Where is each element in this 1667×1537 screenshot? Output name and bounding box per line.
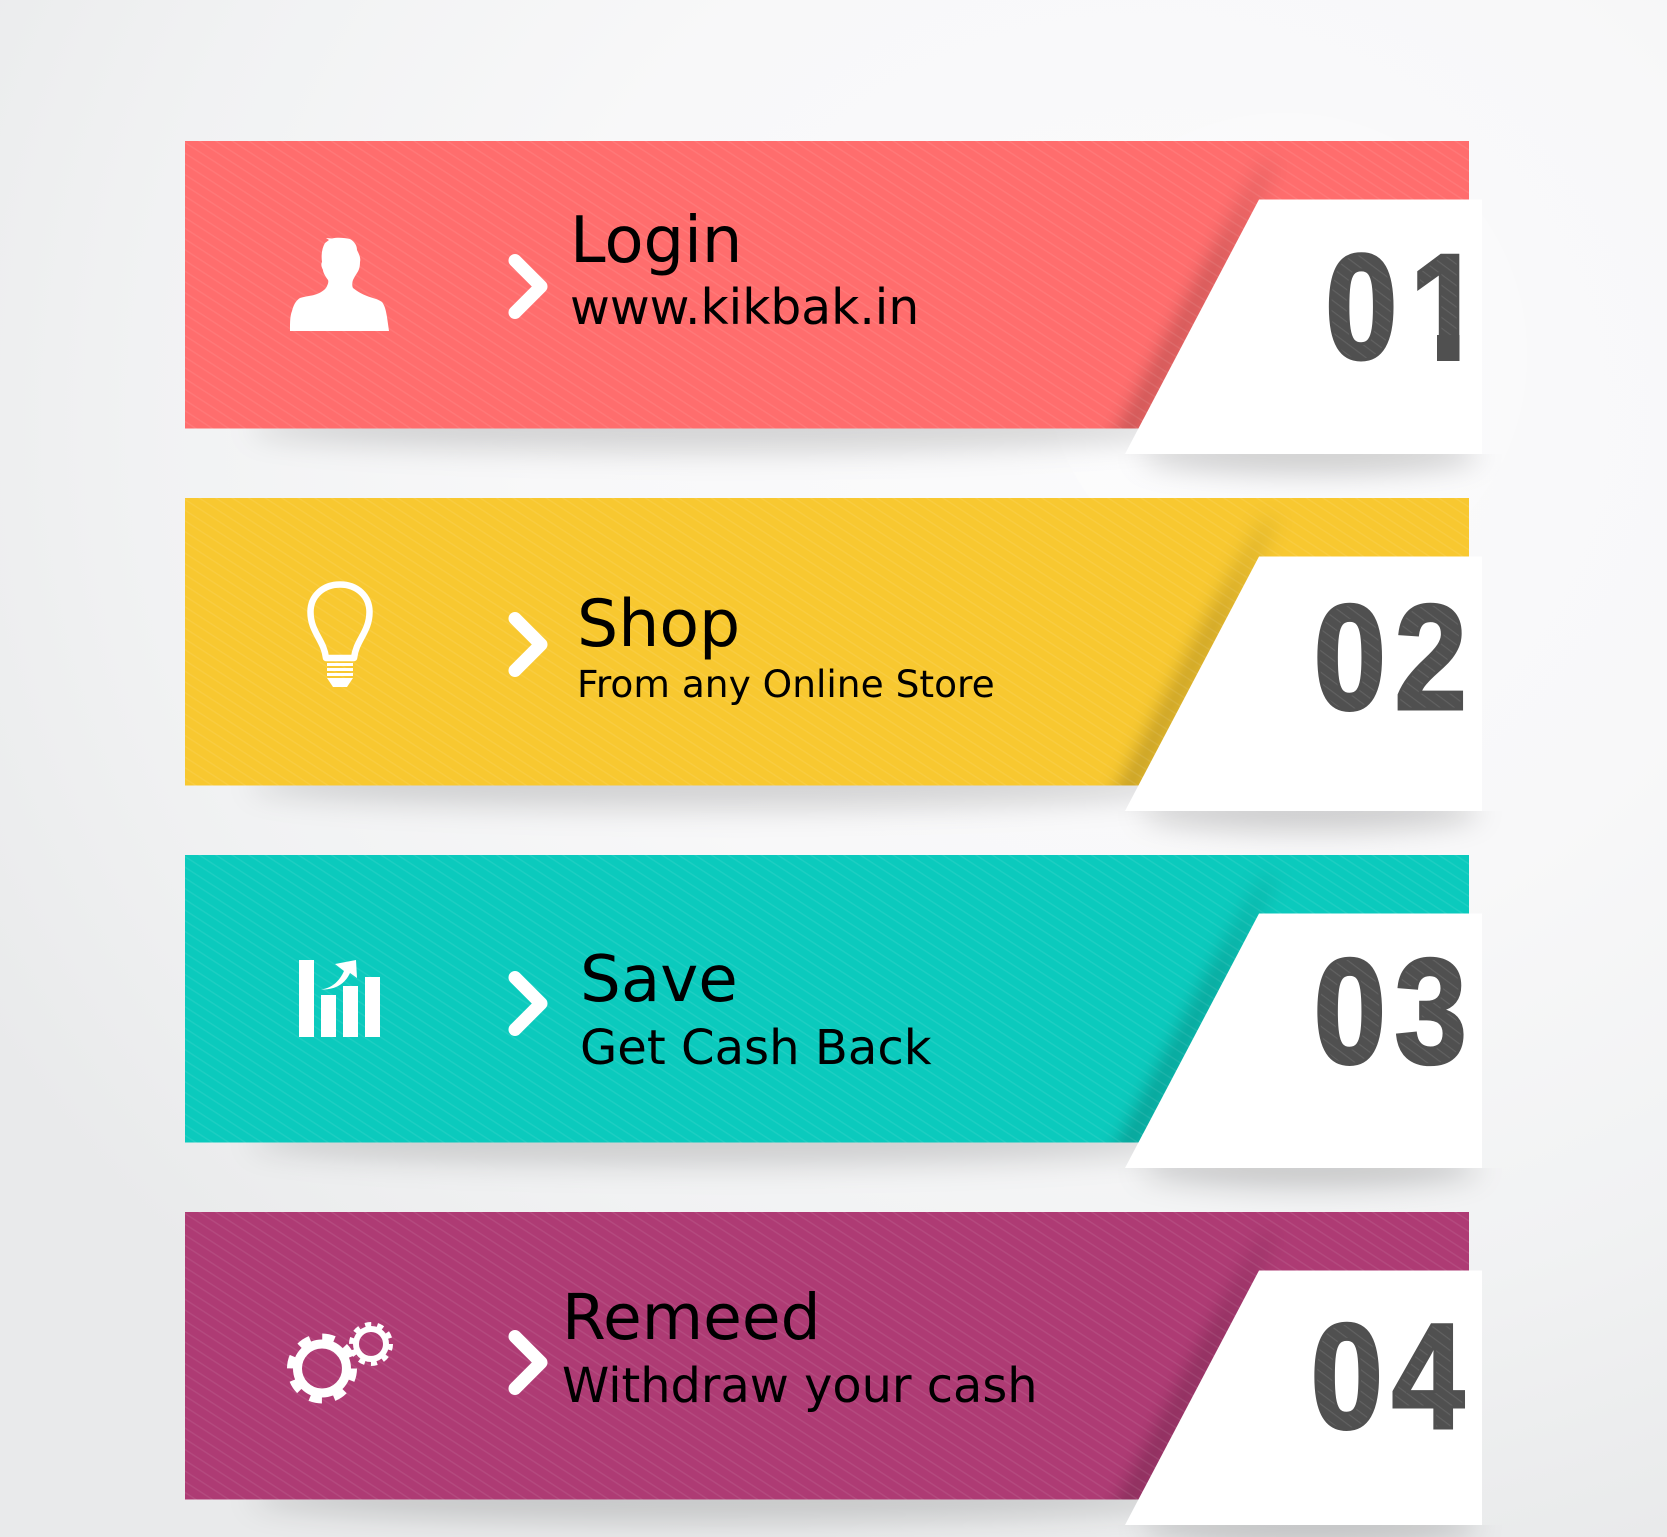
step 3: save [185, 855, 1482, 1188]
fold shadow [1108, 166, 1272, 428]
icon: chevron [515, 978, 541, 1030]
pattern [185, 141, 1469, 428]
pattern [185, 855, 1469, 1142]
number panel [1125, 200, 1482, 454]
number: 01 [1325, 223, 1482, 391]
pattern [185, 1212, 1469, 1500]
bar shadow [258, 428, 1138, 462]
subheading: www.kikbak.in [570, 280, 919, 336]
icon: rising bar chart [299, 960, 380, 1037]
subheading: From any Online Store [577, 662, 995, 706]
panel: red bar [185, 141, 1469, 428]
icon: chevron [515, 1336, 541, 1388]
number panel [1125, 1270, 1482, 1525]
number: 04 [1310, 1292, 1464, 1460]
number: 03 [1314, 927, 1467, 1095]
icon: person [290, 238, 389, 331]
number panel [1125, 914, 1482, 1168]
icon: light bulb [310, 584, 370, 687]
heading: Remeed [562, 1281, 821, 1354]
subheading: Withdraw your cash [562, 1359, 1038, 1414]
bar shadow [261, 1142, 1138, 1176]
step 1: login [185, 141, 1482, 474]
icon: chevron [515, 260, 541, 312]
heading: Login [570, 204, 742, 278]
heading: Shop [577, 587, 740, 662]
panel shadow [1142, 1525, 1478, 1537]
panel: yellow bar [185, 498, 1469, 786]
subheading: Get Cash Back [580, 1020, 932, 1076]
number panel [1125, 556, 1482, 811]
panel shadow [1140, 454, 1480, 486]
step 2: shop [185, 498, 1482, 831]
number: 02 [1314, 573, 1467, 741]
icon: chevron [515, 618, 541, 670]
heading: Save [580, 942, 738, 1017]
bar shadow [261, 1500, 1138, 1532]
pattern [185, 498, 1469, 786]
fold shadow [1111, 1248, 1265, 1500]
fold shadow [1110, 885, 1269, 1142]
bar shadow [258, 786, 1138, 820]
panel shadow [1140, 1168, 1480, 1200]
panel: plum bar [185, 1212, 1469, 1500]
background circle [1043, 113, 1527, 597]
step 4: redeem [185, 1212, 1482, 1537]
fold shadow [1108, 524, 1272, 786]
icon: gears [290, 1324, 390, 1400]
panel shadow [1140, 811, 1480, 843]
panel: teal bar [185, 855, 1469, 1142]
